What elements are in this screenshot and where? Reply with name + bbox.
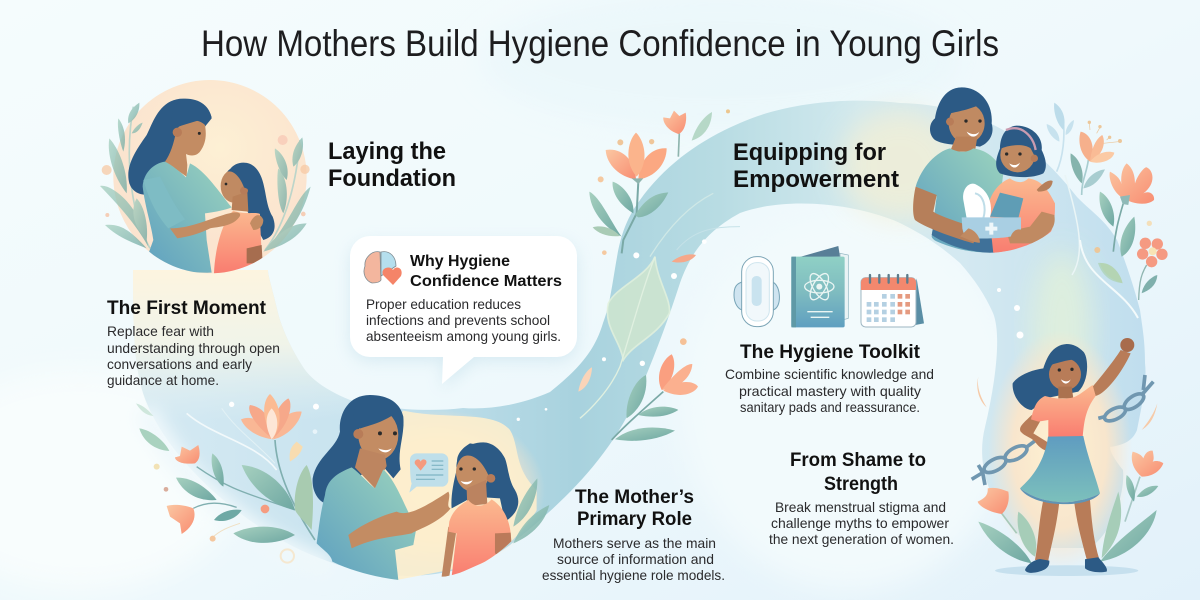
illustration: girl breaking chains — [972, 338, 1163, 576]
mother — [128, 99, 232, 273]
left floral spray — [136, 394, 520, 563]
daughter — [996, 126, 1046, 177]
lower flower — [612, 392, 663, 440]
text block: From Shame to Strength: the next generation of women. — [769, 531, 954, 547]
illustration: mother comforting daughter — [100, 80, 311, 273]
right leaves behind daughter — [513, 478, 537, 527]
speech bubble: Why Hygiene Confidence Matters: Confidence Matters — [410, 273, 562, 290]
text block: The First Moment — [107, 297, 280, 388]
text block: The Hygiene Toolkit: Combine scientific knowledge and — [725, 366, 934, 382]
icon: calendar — [861, 275, 924, 327]
sun circle backdrop — [113, 80, 307, 273]
text block: The Hygiene Toolkit — [725, 342, 934, 415]
right floral spray — [1047, 103, 1168, 300]
text block: From Shame to Strength: From Shame to — [790, 450, 926, 471]
ground shadow — [995, 565, 1138, 576]
speech bubble: Why Hygiene Confidence Matters: Why Hygiene — [410, 253, 510, 270]
text block: The Mother's Primary Role: Primary Role — [577, 509, 692, 530]
text block: The First Moment: guidance at home. — [107, 372, 219, 388]
ribbon accents — [997, 175, 1138, 338]
upper flower blooms — [606, 150, 636, 179]
mother — [930, 87, 993, 147]
text block: The Hygiene Toolkit: The Hygiene Toolkit — [740, 342, 921, 363]
heading: Equipping for Empowerment — [733, 139, 899, 193]
text block: The Mother's Primary Role — [542, 487, 725, 583]
speech bubble: Why Hygiene Confidence Matters — [350, 236, 577, 389]
upper flower stem and leaves — [622, 182, 638, 253]
lotus flower — [241, 418, 273, 439]
icon: science book — [791, 246, 848, 327]
text block: The Mother's Primary Role: essential hygiene role models. — [542, 567, 725, 583]
text block: From Shame to Strength — [769, 450, 954, 547]
daughter — [170, 163, 275, 273]
text block: The Hygiene Toolkit: sanitary pads and reassurance. — [740, 399, 920, 415]
text block: From Shame to Strength: Break menstrual stigma and — [775, 499, 946, 515]
toolkit icons — [734, 246, 924, 327]
speech bubble: Why Hygiene Confidence Matters: absenteeism among young girls. — [366, 328, 561, 344]
text block: From Shame to Strength: Strength — [824, 474, 898, 495]
left leaf branch — [100, 103, 150, 248]
text block: The First Moment: conversations and early — [107, 356, 252, 372]
chains — [972, 375, 1153, 485]
mother's hands on shoulder — [170, 212, 240, 238]
flowing ribbon path — [133, 101, 1146, 576]
icon: sanitary pad — [734, 257, 779, 327]
heading: Equipping for Empowerment: Equipping for — [733, 139, 886, 166]
large leaf centrepiece — [607, 257, 670, 360]
hygiene kit box — [960, 184, 1028, 243]
floral spray on S-ribbon — [545, 109, 740, 441]
backdrop cream — [343, 411, 537, 580]
text block: The Mother's Primary Role: source of information and — [557, 551, 714, 567]
speech bubble: Why Hygiene Confidence Matters: Proper education reduces — [366, 296, 521, 312]
plants — [978, 451, 1163, 563]
speech bubble: Why Hygiene Confidence Matters: infections and prevents school — [366, 312, 550, 328]
heading: Laying the Foundation: Foundation — [328, 165, 456, 192]
heading: Laying the Foundation — [328, 138, 456, 192]
girl — [1013, 338, 1134, 573]
text block: The First Moment: Replace fear with — [107, 323, 214, 339]
daughter — [451, 442, 518, 522]
text block: The Mother's Primary Role: The Mother’s — [575, 487, 694, 508]
chat bubble icon — [409, 453, 448, 493]
text block: The First Moment: The First Moment — [107, 297, 266, 319]
text block: From Shame to Strength: challenge myths to empower — [771, 515, 949, 531]
text block: The Mother's Primary Role: Mothers serve as the main — [553, 535, 716, 551]
text block: The Hygiene Toolkit: practical mastery with quality — [739, 383, 921, 399]
title: How Mothers Build Hygiene Confidence in Young Girls — [201, 23, 999, 64]
illustration: mother and daughter talking — [136, 394, 549, 580]
heading: Laying the Foundation: Laying the — [328, 138, 446, 165]
heading: Equipping for Empowerment: Empowerment — [733, 166, 899, 193]
illustration: mother and daughter with hygiene kit — [913, 87, 1168, 300]
mother — [313, 395, 404, 503]
text block: The First Moment: understanding through open — [107, 340, 280, 356]
right leaf branch — [263, 135, 311, 252]
icon: brain and heart — [364, 252, 402, 285]
